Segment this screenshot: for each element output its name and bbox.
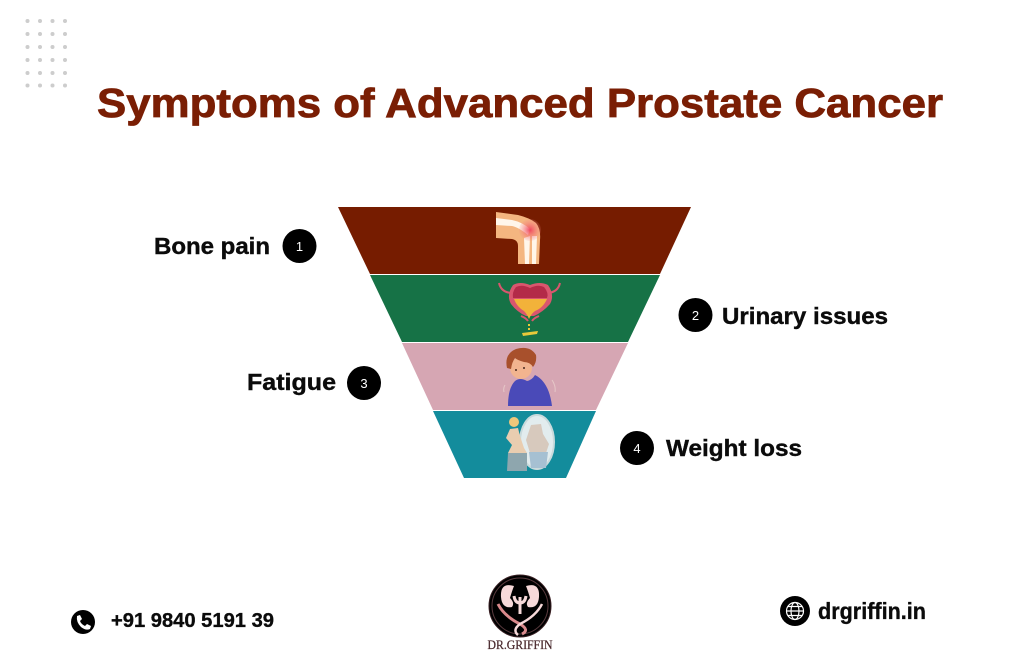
- number badge 3: 3: [360, 376, 368, 391]
- number badge 1: [282, 229, 316, 263]
- logo: Dr. Griffin: [488, 575, 553, 652]
- decorative dot grid: [26, 19, 67, 88]
- icon: bladder: [499, 283, 560, 336]
- funnel tier 2: urinary issues: [370, 275, 660, 342]
- logo: Dr. Griffin: DR.GRIFFIN: [488, 637, 553, 652]
- phone contact: +91 9840 5191 39: [111, 610, 274, 632]
- icon: woman and mirror: [506, 415, 554, 471]
- label: fatigue: [247, 366, 381, 400]
- label: fatigue: Fatigue: [247, 369, 336, 395]
- label: weight loss: Weight loss: [666, 435, 802, 461]
- funnel tier 4: weight loss: [433, 411, 596, 478]
- label: urinary issues: [678, 298, 888, 332]
- title: Symptoms of Advanced Prostate Cancer: [97, 80, 943, 126]
- website contact: drgriffin.in: [818, 598, 926, 624]
- number badge 4: [620, 431, 654, 465]
- icon: knee joint: [496, 212, 541, 264]
- icon: globe: [780, 596, 810, 626]
- number badge 2: [678, 298, 712, 332]
- label: urinary issues: Urinary issues: [722, 303, 888, 329]
- number badge 4: 4: [633, 441, 641, 456]
- icon: phone: [71, 610, 95, 634]
- label: bone pain: Bone pain: [154, 233, 270, 259]
- funnel chart: [338, 207, 691, 478]
- number badge 1: 1: [296, 239, 303, 254]
- funnel tier 3: fatigue: [402, 343, 628, 410]
- number badge 2: 2: [692, 308, 699, 323]
- icon: tired person: [504, 348, 555, 406]
- label: weight loss: [620, 431, 802, 465]
- website contact: [780, 596, 926, 626]
- label: bone pain: [154, 229, 316, 263]
- funnel tier 1: bone pain: [338, 207, 691, 274]
